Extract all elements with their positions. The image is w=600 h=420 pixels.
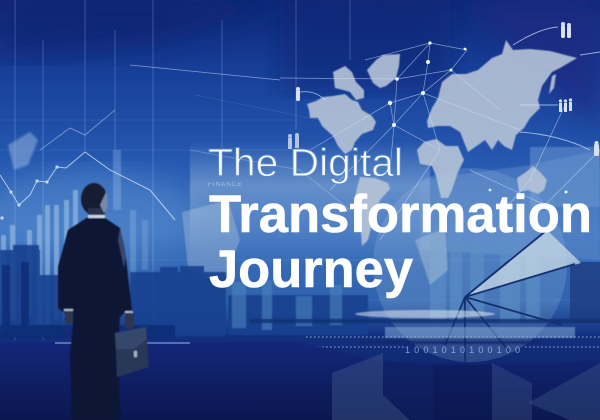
businessman (58, 183, 149, 420)
hexagon overlay shapes (332, 353, 600, 420)
title: Transformation: Transformation (209, 185, 592, 244)
horizontal grid lines (0, 95, 600, 300)
pale band panels behind map (182, 140, 600, 285)
man: cuffs (64, 309, 133, 313)
man: hands (65, 310, 134, 329)
title: The Digital: The Digital (208, 142, 403, 185)
people icons with connectors (288, 22, 600, 156)
finance small label: FINANCE (208, 182, 243, 188)
briefcase (115, 327, 149, 377)
map: South America (354, 177, 390, 246)
dotted data rows (306, 337, 600, 347)
world map (307, 40, 577, 285)
map: Canadian islands (333, 66, 364, 100)
map: Eurasia (427, 40, 577, 152)
map: Australia (517, 166, 547, 194)
line chart (0, 110, 350, 220)
city skyline (0, 235, 540, 338)
network connections (130, 43, 600, 240)
vertical data streaks (15, 0, 350, 340)
man: legs and jacket (58, 217, 132, 420)
network nodes (388, 41, 568, 207)
title (208, 142, 592, 299)
map: Greenland (367, 54, 400, 88)
map: Kamchatka and islands (549, 74, 556, 94)
binary digits row: 1001010100100 (405, 345, 520, 355)
man: jacket sleeve highlight (118, 228, 126, 268)
small left map fragment (8, 132, 38, 170)
map: Africa (417, 139, 464, 198)
map: North America (307, 94, 376, 154)
left bar chart (1, 150, 148, 330)
man: head and hair (81, 183, 108, 218)
floor (0, 342, 600, 420)
horizon strip with lights (250, 310, 600, 344)
title: Journey: Journey (209, 240, 414, 299)
pie chart circle (373, 168, 600, 363)
